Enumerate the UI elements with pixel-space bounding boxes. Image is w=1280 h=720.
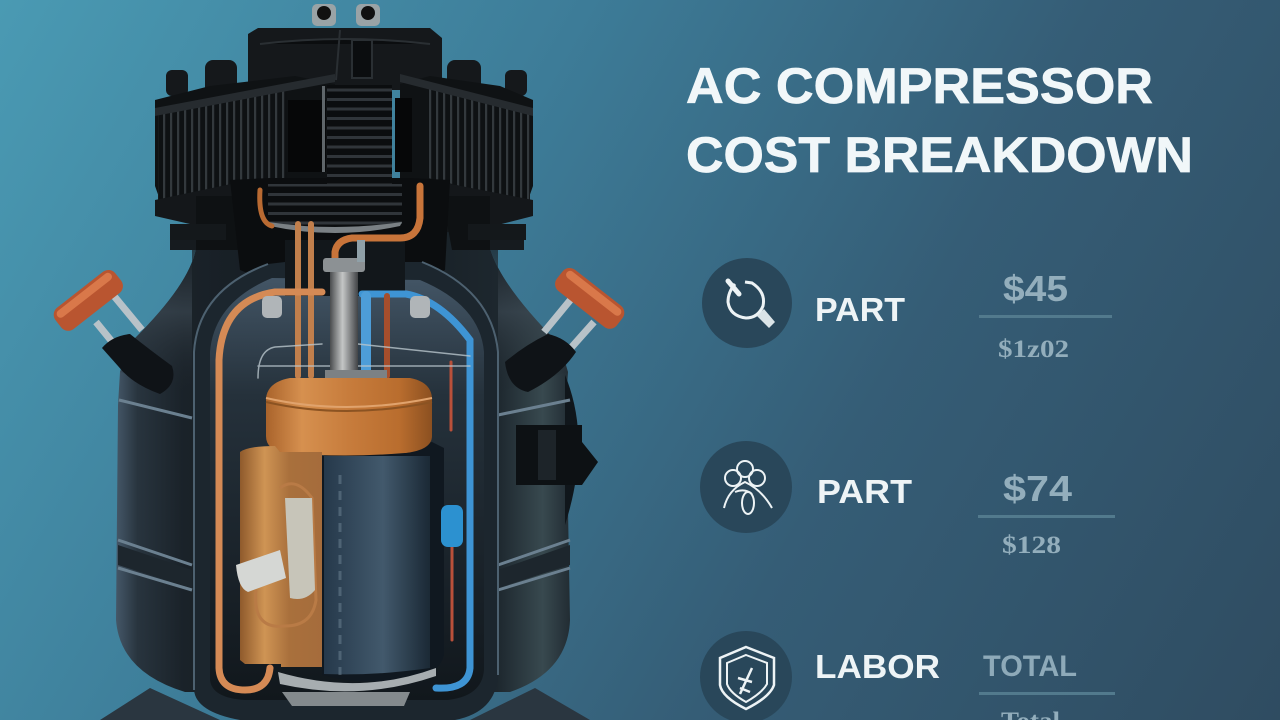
price: $74: $74 [1003,468,1072,509]
copper and blue tubing [219,186,470,690]
label: labor: LABOR [815,648,940,685]
icon: wrench ring [702,258,792,348]
title line 2: COST BREAKDOWN [686,127,1193,183]
cutaway chamber [194,240,498,720]
icon: terminal bolts [312,4,380,26]
left fins [155,74,335,203]
central steel shaft [262,240,430,378]
copper dome [266,378,432,456]
label: part: PART [817,473,912,510]
icon: shield [700,631,792,720]
cooling head [155,4,533,290]
icon: cluster [700,441,792,533]
title line 1: AC COMPRESSOR [686,58,1153,114]
title [686,58,1193,183]
icon: base feet [100,688,590,720]
price: $45: $45 [1003,268,1068,309]
compressor shell [116,222,598,692]
left valve [50,266,174,394]
copper accumulator [236,446,322,667]
sub price: $128 [1002,532,1061,559]
motor dark cylinder [322,442,444,681]
sub price: $1z02 [998,336,1069,363]
label: part: PART [815,291,905,328]
label: total: TOTAL [983,650,1077,683]
row: labor and total [700,631,1115,720]
center coil [327,85,392,200]
row: part 2 [700,441,1115,559]
right fins [400,74,533,203]
row: part 1 [702,258,1112,363]
blue clip [441,505,463,547]
compressor illustration [50,4,628,720]
metal base ring [278,668,436,706]
right valve [505,264,628,392]
